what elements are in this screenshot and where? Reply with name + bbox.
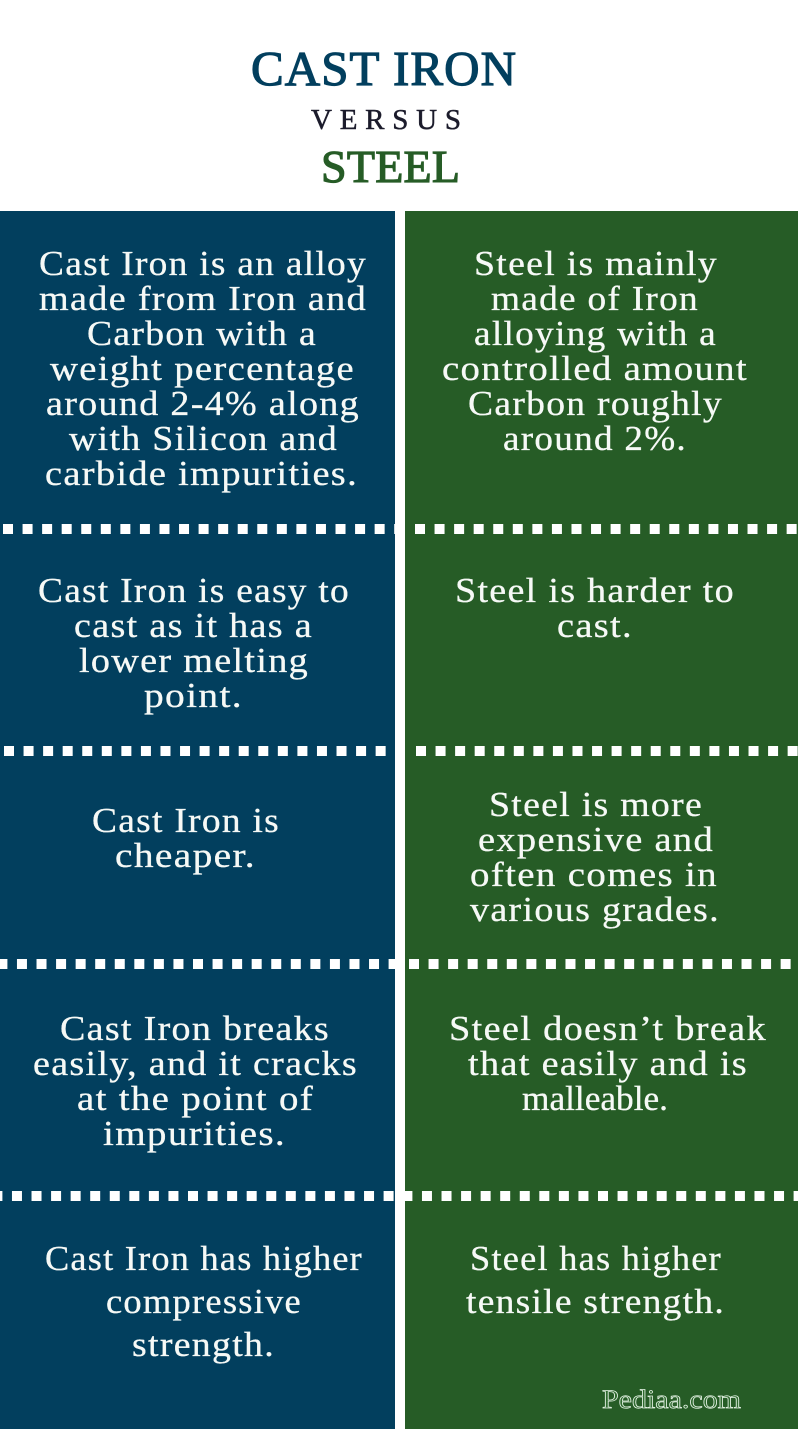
text: steel casting: Steel is harder to (455, 571, 735, 610)
text: cast iron casting: lower melting (79, 641, 309, 680)
heading: cast iron: CAST IRON (251, 41, 516, 96)
text: cast iron strength: strength. (132, 1325, 275, 1364)
text: cast iron composition: Cast Iron is an alloy (39, 244, 367, 283)
panel: cast iron column background (0, 211, 395, 1429)
text: cast iron brittleness: impurities. (103, 1114, 286, 1153)
text: steel composition: alloying with a (474, 314, 717, 353)
text: cast iron brittleness (33, 1009, 358, 1153)
text: steel strength: tensile strength. (466, 1282, 725, 1321)
text: steel composition: around 2%. (503, 419, 687, 458)
text: cast iron brittleness: Cast Iron breaks (60, 1009, 330, 1048)
text: cast iron brittleness: at the point of (77, 1079, 314, 1118)
logo: Pediaa.com: Pediaa.com (602, 1385, 741, 1414)
text: cast iron composition: Carbon with a (87, 314, 317, 353)
text: cast iron cost: cheaper. (115, 836, 256, 875)
text: cast iron strength: Cast Iron has higher (45, 1239, 363, 1278)
panel: steel column background (405, 211, 798, 1429)
dotted divider row 4 (0, 1191, 798, 1201)
text: steel malleability (449, 1009, 767, 1118)
text: steel cost (470, 785, 720, 929)
text: cast iron composition: made from Iron and (39, 279, 367, 318)
text: steel cost: expensive and (478, 820, 714, 859)
text: cast iron strength (45, 1239, 363, 1364)
text: steel cost: often comes in (470, 855, 718, 894)
text: steel casting: cast. (557, 606, 633, 645)
text: steel casting (455, 571, 735, 645)
text: steel strength: Steel has higher (470, 1239, 722, 1278)
text: cast iron cost: Cast Iron is (92, 801, 280, 840)
text: cast iron composition: weight percentage (50, 349, 355, 388)
dotted divider row 3 (0, 959, 798, 969)
text: cast iron composition: around 2-4% along (46, 384, 360, 423)
text: cast iron casting: cast as it has a (74, 606, 313, 645)
text: cast iron casting (38, 571, 350, 715)
dotted divider row 2 (4, 746, 798, 756)
text: cast iron casting: point. (144, 676, 243, 715)
title block (251, 41, 516, 192)
text: cast iron composition (39, 244, 367, 493)
text: steel composition: controlled amount (442, 349, 748, 388)
dotted divider row 1 (3, 524, 798, 534)
text: steel strength (466, 1239, 725, 1321)
text: cast iron strength: compressive (106, 1282, 302, 1321)
text: steel malleability: Steel doesn’t break (449, 1009, 767, 1048)
text: cast iron casting: Cast Iron is easy to (38, 571, 350, 610)
text: steel malleability: malleable. (522, 1079, 668, 1118)
text: cast iron brittleness: easily, and it cracks (33, 1044, 358, 1083)
text: cast iron composition: carbide impurities. (45, 454, 358, 493)
text: cast iron cost (92, 801, 280, 875)
text: cast iron composition: with Silicon and (69, 419, 338, 458)
text: steel composition: Carbon roughly (468, 384, 723, 423)
heading: steel: STEEL (321, 141, 460, 192)
text: steel cost: Steel is more (489, 785, 703, 824)
text: steel composition: made of Iron (491, 279, 699, 318)
text: steel cost: various grades. (470, 890, 720, 929)
subheading: versus: VERSUS (311, 104, 461, 136)
text: steel malleability: that easily and is (468, 1044, 748, 1083)
text: steel composition: Steel is mainly (474, 244, 718, 283)
text: steel composition (442, 244, 748, 458)
